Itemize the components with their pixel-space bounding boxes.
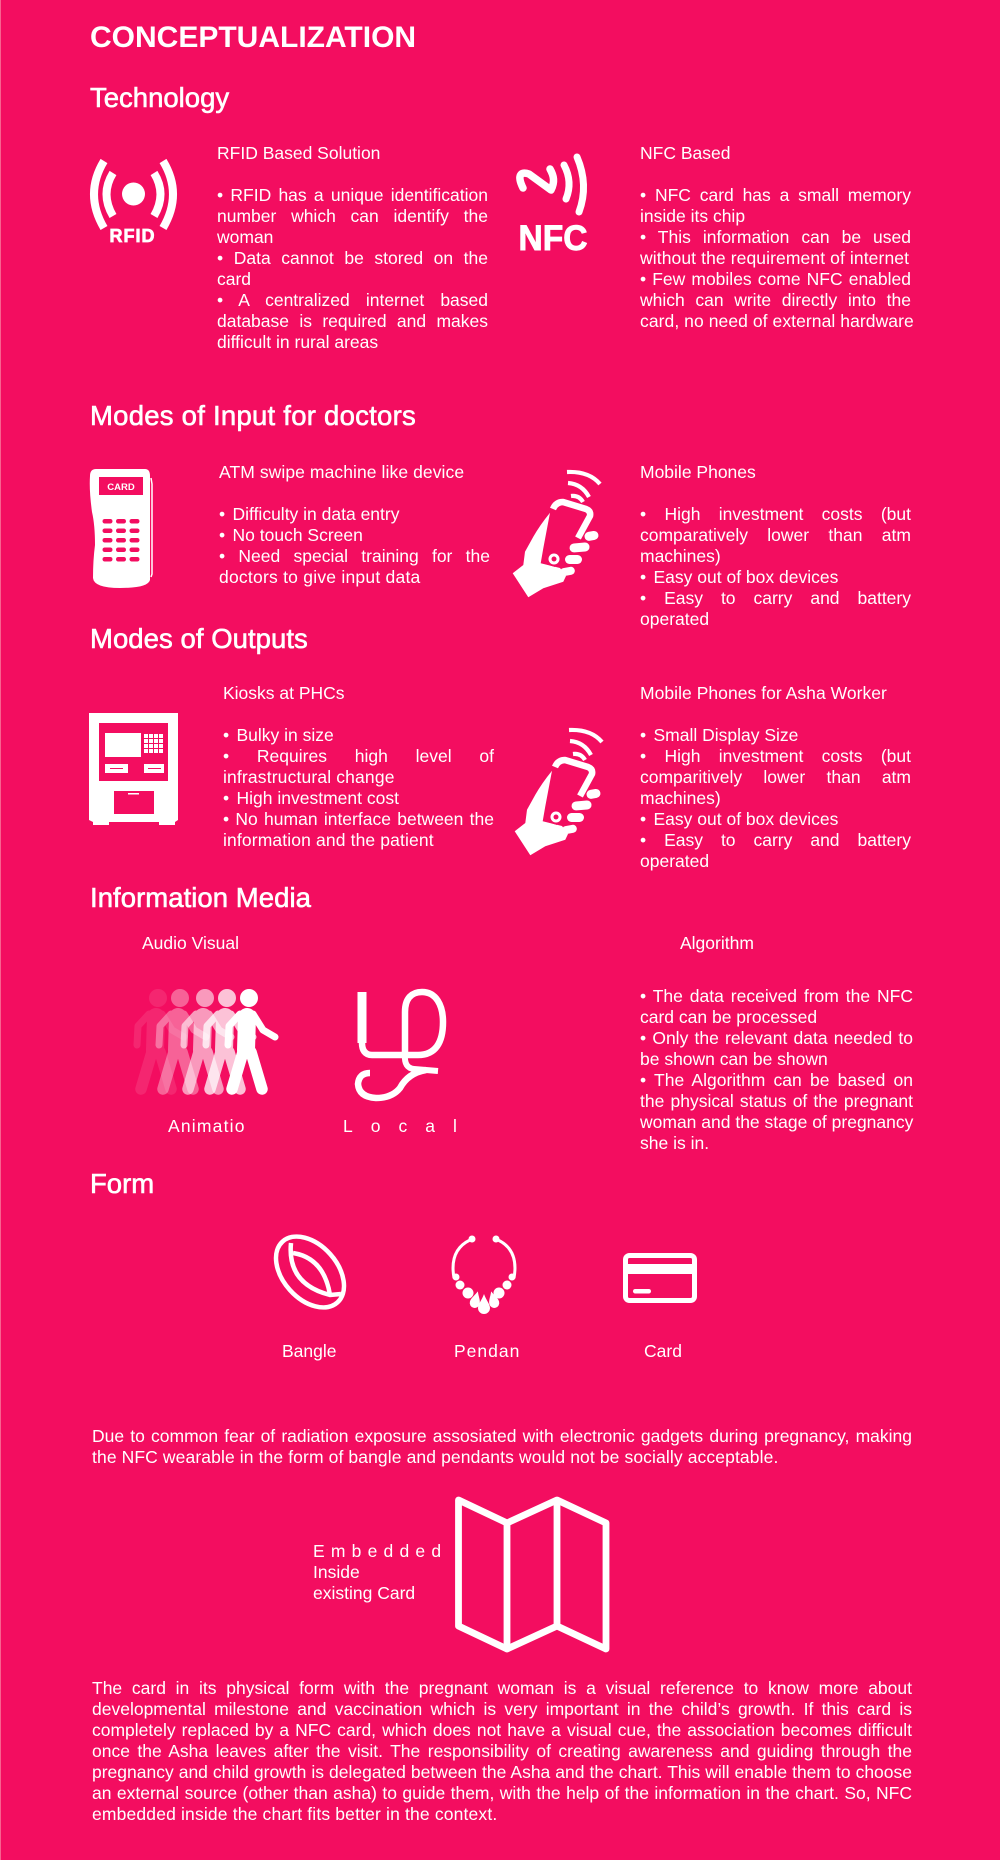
text: closing paragraph: The card in its physical form with the pregnant woman is a visual reference to know more about [92,1678,912,1698]
text: closing paragraph: completely replaced by a NFC card, which does not have a visual cue, the association becomes difficult [92,1720,912,1740]
label: Embedded inside existing card [313,1541,447,1603]
text: Mobile phones: comparatively lower than atm [640,525,911,545]
text: NFC based: • NFC card has a small memory [640,185,911,205]
text: RFID based solution: database is required and makes [217,311,488,331]
text: Algorithm details: • The Algorithm can be based on [640,1070,913,1090]
text: RFID based solution [217,143,488,352]
text: closing paragraph: embedded inside the chart fits better in the context. [92,1804,497,1824]
text: Mobile phones for Asha worker: • Easy out of box devices [640,809,838,829]
text: radiation paragraph: the NFC wearable in the form of bangle and pendants would not be socially acceptable. [92,1447,778,1467]
text: Mobile phones for Asha worker [640,683,911,871]
label: Pendan: Pendan [454,1341,520,1361]
text: NFC based: which can write directly into the [640,290,911,310]
text: RFID based solution: • A centralized internet based [217,290,488,310]
text: NFC based: • This information can be used [640,227,911,247]
label: Audio Visual: Audio Visual [142,933,239,953]
text: Mobile phones for Asha worker: operated [640,851,709,871]
icon: walking figures animation [134,989,278,1095]
icon: swipe machine: CARD [107,482,135,493]
icon: pendant necklace [452,1236,516,1314]
text: RFID based solution: • RFID has a unique identification [217,185,488,205]
text: Algorithm details: woman and the stage of pregnancy [640,1112,913,1132]
text: Mobile phones for Asha worker: comparitively lower than atm [640,767,911,787]
icon: RFID [90,158,178,246]
text: Mobile phones for Asha worker: Mobile Phones for Asha Worker [640,683,887,703]
text: NFC based: without the requirement of internet [640,248,909,268]
label: Embedded inside existing card: Inside [313,1562,360,1582]
text: RFID based solution: card [217,269,251,289]
text: Algorithm details: she is in. [640,1133,709,1153]
label: Embedded inside existing card: Embedded [313,1541,447,1561]
text: ATM swipe machine: • Difficulty in data entry [219,504,399,524]
text: RFID based solution: • Data cannot be stored on the [217,248,488,268]
icon: hand holding mobile phone [512,470,602,598]
text: Algorithm details: be shown can be shown [640,1049,828,1069]
icon: RFID: RFID [110,226,154,246]
text: radiation paragraph [92,1426,912,1467]
text: ATM swipe machine: ATM swipe machine like device [219,462,464,482]
heading: Modes of Input for doctors: Modes of Input for doctors [90,400,416,431]
text: RFID based solution: number which can identify the [217,206,488,226]
text: Mobile phones: Mobile Phones [640,462,756,482]
label: Embedded inside existing card: existing Card [313,1583,415,1603]
icon: folded card [455,1496,610,1652]
text: ATM swipe machine: • No touch Screen [219,525,363,545]
text: Algorithm details: • Only the relevant data needed to [640,1028,913,1048]
text: closing paragraph: developmental milestone and vaccination which is very important in the child’s growth. If this card is [92,1699,912,1719]
text: Mobile phones for Asha worker: machines) [640,788,721,808]
icon: NFC: NFC [518,219,588,258]
text: RFID based solution: woman [217,227,273,247]
text: NFC based: • Few mobiles come NFC enabled [640,269,911,289]
text: Mobile phones: machines) [640,546,721,566]
text: Algorithm details: • The data received from the NFC [640,986,913,1006]
heading: Modes of Outputs: Modes of Outputs [90,623,308,654]
text: Mobile phones for Asha worker: • Small Display Size [640,725,798,745]
heading: Form: Form [90,1168,154,1199]
title: CONCEPTUALIZATION [90,21,416,54]
text: Mobile phones for Asha worker: • Easy to carry and battery [640,830,911,850]
text: radiation paragraph: Due to common fear of radiation exposure assosiated with electronic gadgets during pregnancy, making [92,1426,912,1446]
icon: NFC [516,154,588,258]
text: Kiosks at PHCs [223,683,494,850]
icon: card [623,1253,697,1303]
text: closing paragraph [92,1678,912,1824]
icon: kiosk [89,713,178,825]
text: closing paragraph: pregnancy and child growth is delegated between the Asha and the chart. This will enable them to choose [92,1762,912,1782]
icon: local script character [354,988,446,1102]
text: Mobile phones [640,462,911,629]
text: Mobile phones: • High investment costs (but [640,504,911,524]
text: Mobile phones: operated [640,609,709,629]
label: Card: Card [644,1341,682,1361]
text: closing paragraph: once the Asha leaves after the visit. The responsibility of creating awareness and guiding through the [92,1741,912,1761]
text: Algorithm details: card can be processed [640,1007,817,1027]
text: ATM swipe machine [219,462,490,587]
text: Kiosks at PHCs: information and the patient [223,830,434,850]
text: Kiosks at PHCs: infrastructural change [223,767,395,787]
text: Algorithm details [640,986,914,1153]
label: Algorithm: Algorithm [680,933,754,953]
text: NFC based: card, no need of external hardware [640,311,914,331]
heading: Information Media: Information Media [90,882,311,913]
text: NFC based [640,143,914,331]
icon: hand holding mobile phone (Asha worker) [514,728,604,856]
text: Algorithm details: the physical status of the pregnant [640,1091,913,1111]
label: Bangle: Bangle [282,1341,336,1361]
text: NFC based: inside its chip [640,206,745,226]
text: NFC based: NFC Based [640,143,730,163]
text: Kiosks at PHCs: • No human interface between the [223,809,494,829]
label: Animatio: Animatio [168,1116,246,1136]
text: Mobile phones: • Easy out of box devices [640,567,838,587]
text: Mobile phones for Asha worker: • High investment costs (but [640,746,911,766]
text: Kiosks at PHCs: • Requires high level of [223,746,494,766]
text: ATM swipe machine: • Need special training for the [219,546,490,566]
label: Local: Local [343,1116,475,1136]
text: Mobile phones: • Easy to carry and battery [640,588,911,608]
text: RFID based solution: RFID Based Solution [217,143,380,163]
text: Kiosks at PHCs: • High investment cost [223,788,399,808]
icon: bangle [274,1234,346,1310]
icon: swipe machine [90,469,153,588]
text: closing paragraph: an external source (other than asha) to guide them, with the help of the information in the chart. So, NFC [92,1783,912,1803]
text: Kiosks at PHCs: • Bulky in size [223,725,334,745]
text: Kiosks at PHCs: Kiosks at PHCs [223,683,345,703]
text: RFID based solution: difficult in rural areas [217,332,378,352]
heading: Technology: Technology [90,82,229,113]
text: ATM swipe machine: doctors to give input data [219,567,421,587]
